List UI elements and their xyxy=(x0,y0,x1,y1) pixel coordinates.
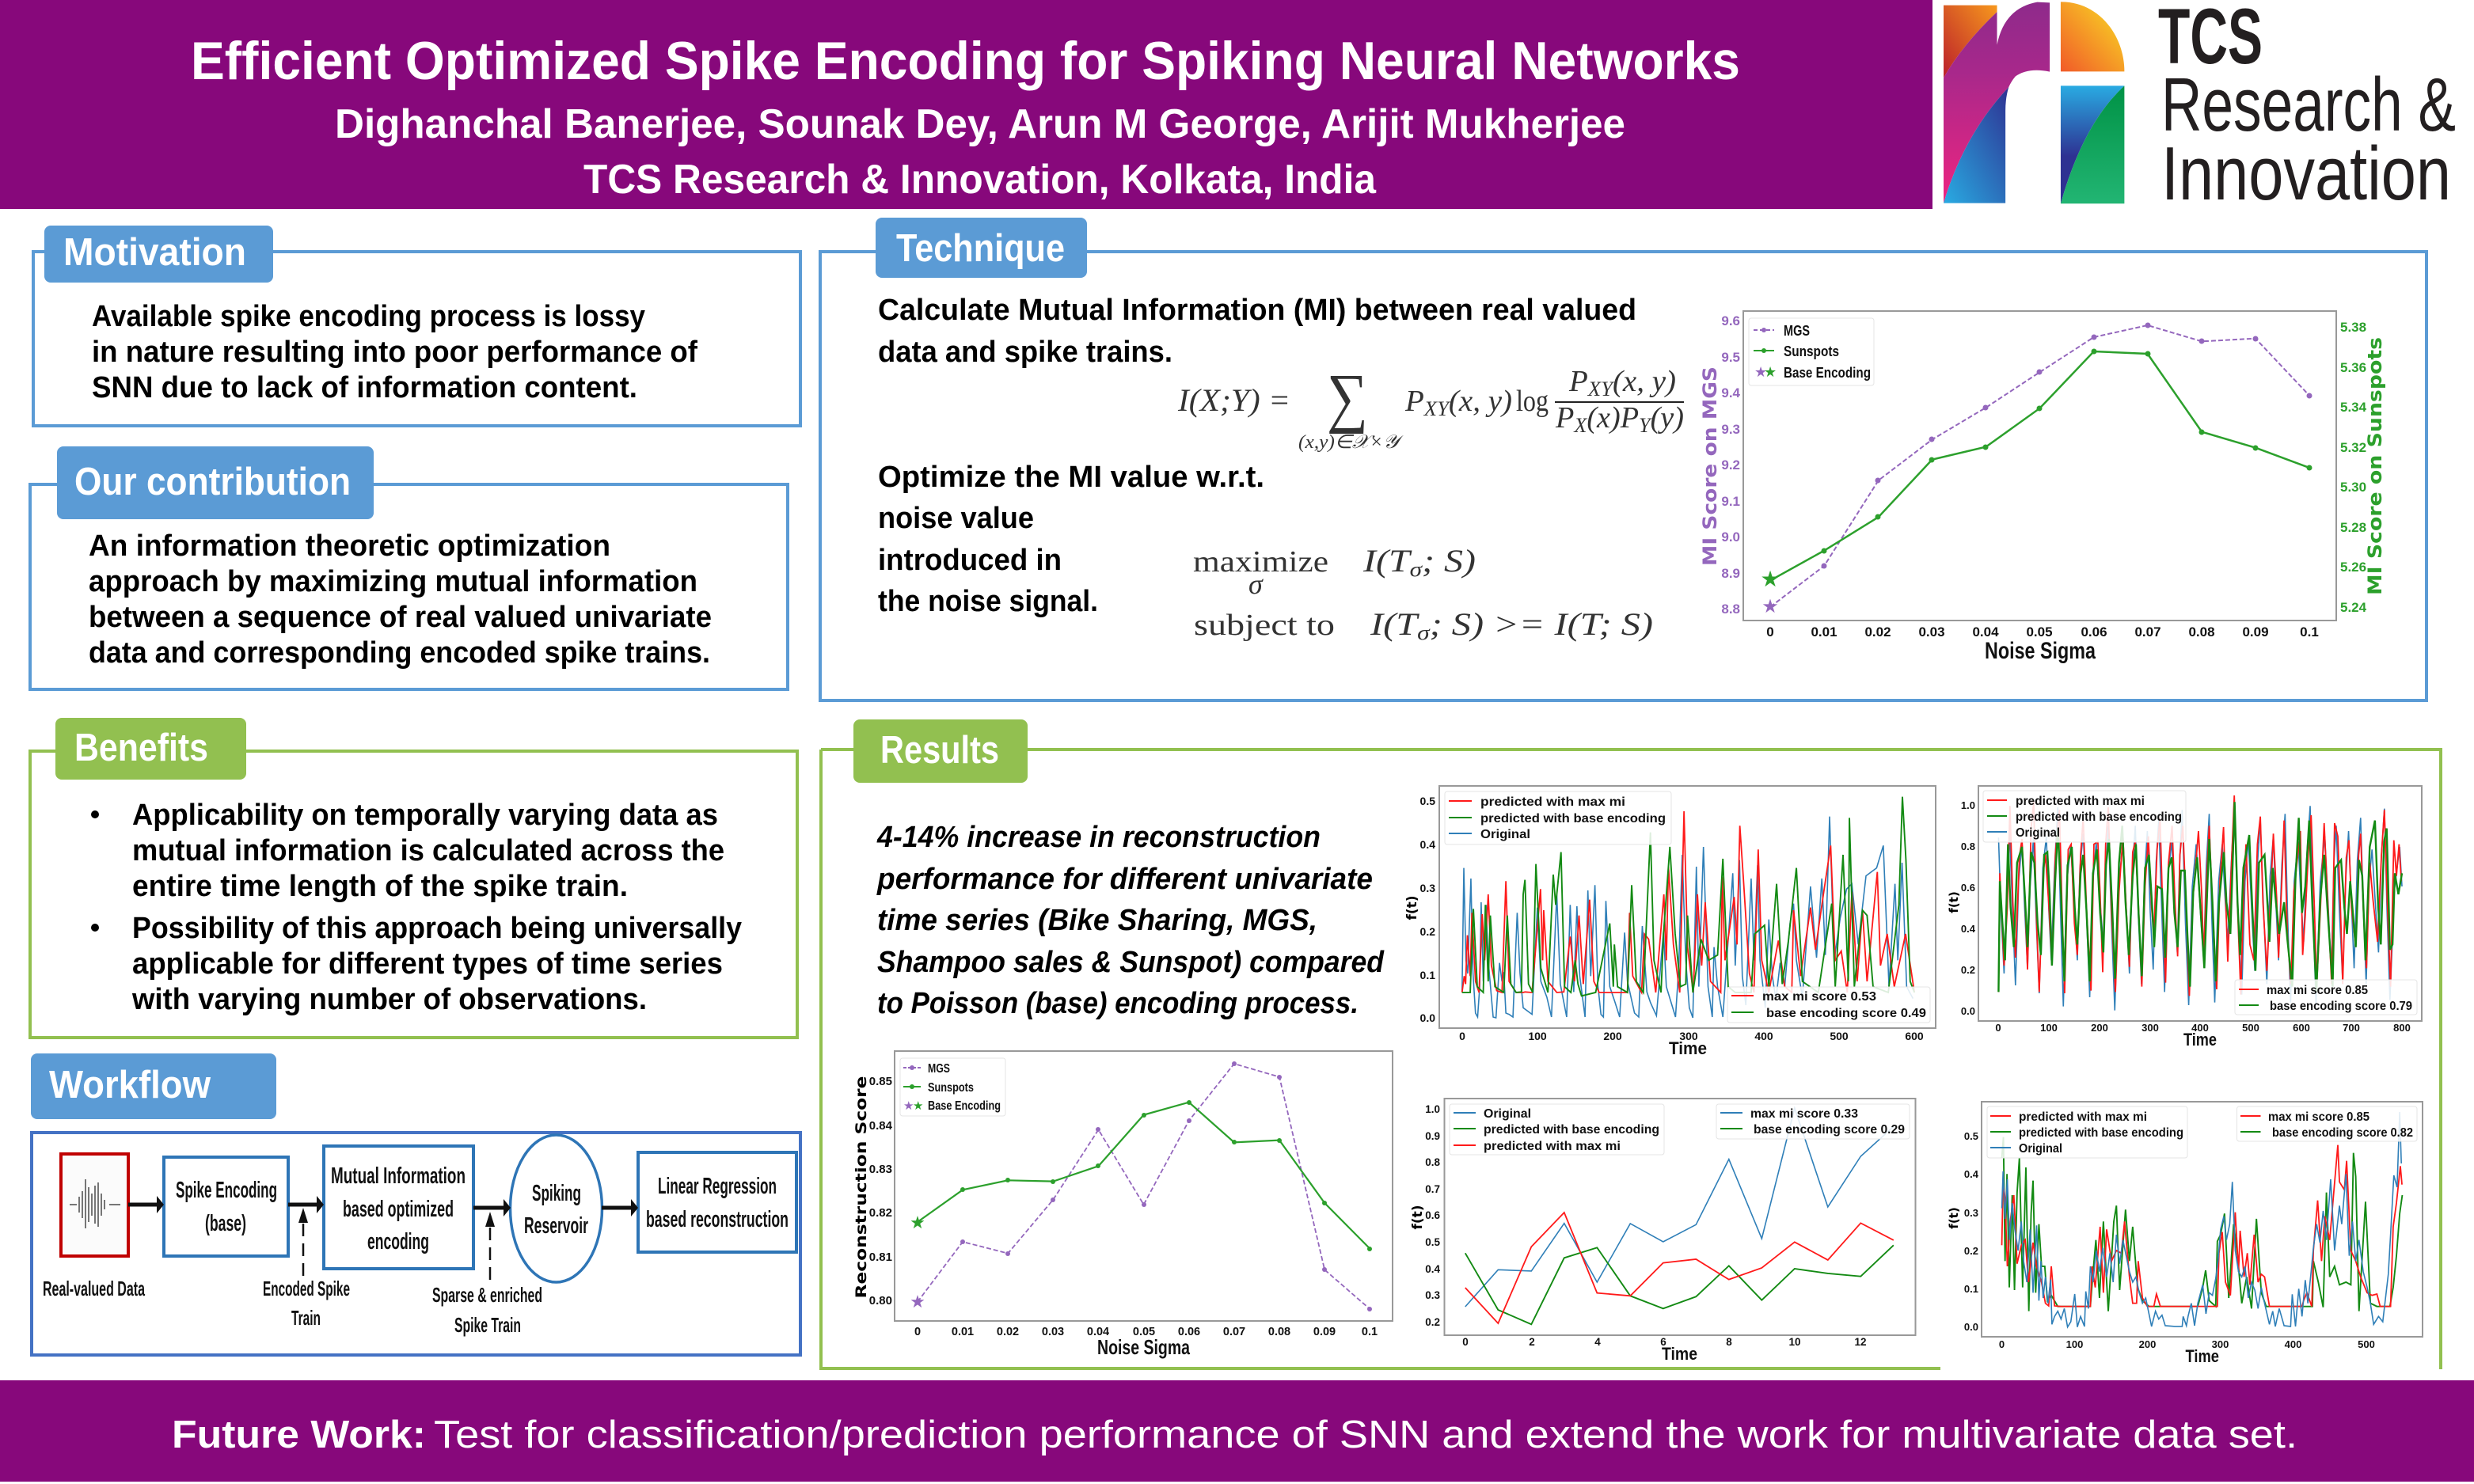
chart: MI score vs noise sigma: 9.0 xyxy=(1721,529,1740,545)
chart: MI score vs noise sigma: 0.09 xyxy=(2242,624,2269,640)
chart: reconstruction short series: 2 xyxy=(1529,1336,1535,1348)
chart: reconstruction score vs noise sigma: Noise Sigma xyxy=(1097,1335,1190,1359)
legend: ★ xyxy=(1754,364,1767,380)
heading: workflow: Workflow xyxy=(49,1064,211,1106)
technique text: optimization: the noise signal. xyxy=(878,585,1098,618)
technique text: mutual information: data and spike trains. xyxy=(878,336,1172,369)
chart: reconstruction 800 steps: 400 xyxy=(2191,1022,2209,1034)
bullet list: Applicability on temporally varying data as xyxy=(132,799,718,832)
contribution text: between a sequence of real valued univariate xyxy=(89,601,712,634)
footer banner: future work xyxy=(0,1380,2474,1482)
panel: technique xyxy=(820,218,2426,700)
chart: reconstruction 550 steps: 100 xyxy=(2066,1338,2083,1350)
heading: technique: Technique xyxy=(896,227,1065,270)
block: linear regression reconstruction xyxy=(638,1152,796,1252)
chart: reconstruction short series xyxy=(1410,1099,1916,1364)
chart: reconstruction 550 steps: 0.4 xyxy=(1964,1168,1979,1180)
chart: reconstruction 800 steps: 0.6 xyxy=(1961,882,1975,894)
chart: reconstruction short series: 12 xyxy=(1854,1336,1867,1348)
equation: mutual information: (x,y)∈𝒳×𝒴 xyxy=(1298,432,1404,453)
affiliation: TCS Research & Innovation, Kolkata, India xyxy=(583,157,1377,203)
score legend xyxy=(2235,980,2417,1015)
heading: motivation: Motivation xyxy=(63,231,246,274)
icon: real-valued data waveform xyxy=(61,1154,128,1256)
chart: reconstruction score vs noise sigma: 0.08 xyxy=(1268,1326,1290,1338)
block: mutual information encoding: Mutual Information xyxy=(331,1163,466,1189)
equation: maximize subject to: maximize xyxy=(1193,545,1328,579)
chart: MI score vs noise sigma: 5.24 xyxy=(2340,600,2367,615)
score legend xyxy=(1727,987,1930,1023)
flow arrows xyxy=(128,1196,638,1216)
chart: reconstruction score vs noise sigma: 0.82 xyxy=(869,1206,892,1220)
heading: our contribution: Our contribution xyxy=(74,461,351,503)
heading: workflow xyxy=(31,1053,276,1119)
chart: reconstruction 550 steps xyxy=(1947,1102,2423,1366)
results text: performance for different univariate xyxy=(876,863,1373,896)
chart: reconstruction 550 steps: 300 xyxy=(2212,1338,2229,1350)
chart: reconstruction 800 steps: 800 xyxy=(2393,1022,2411,1034)
dashed arrow: encoded spike train xyxy=(298,1208,308,1276)
chart: reconstruction 550 steps: 500 xyxy=(2358,1338,2375,1350)
chart: MI score vs noise sigma xyxy=(1699,311,2386,664)
block: mutual information encoding xyxy=(324,1146,473,1269)
chart: MI score vs noise sigma: ★ xyxy=(1761,596,1779,617)
panel: benefits xyxy=(30,718,797,1038)
chart: reconstruction 600 steps: 0.5 xyxy=(1420,795,1435,807)
chart: reconstruction score vs noise sigma: 0 xyxy=(914,1326,921,1338)
legend xyxy=(1749,318,1874,385)
equation: maximize subject to xyxy=(1193,543,1653,644)
chart: MI score vs noise sigma: 5.38 xyxy=(2340,320,2366,335)
chart: MI score vs noise sigma: 5.30 xyxy=(2340,480,2366,495)
chart: reconstruction score vs noise sigma: 0.05 xyxy=(1133,1326,1155,1338)
footer banner: future work: Future Work: xyxy=(172,1414,426,1456)
block: spiking reservoir xyxy=(510,1135,602,1282)
chart: reconstruction 800 steps: 300 xyxy=(2141,1022,2159,1034)
motivation text: in nature resulting into poor performance of xyxy=(92,336,697,369)
chart: reconstruction 600 steps: 300 xyxy=(1679,1030,1698,1042)
results text xyxy=(876,821,1385,1020)
legend xyxy=(1445,791,1671,844)
bullet list: with varying number of observations. xyxy=(131,983,647,1016)
heading: benefits: Benefits xyxy=(74,727,208,769)
panel: our contribution xyxy=(30,446,788,689)
chart: reconstruction 600 steps: 400 xyxy=(1754,1030,1773,1042)
chart: reconstruction 600 steps xyxy=(1404,786,1936,1058)
title: Efficient Optimized Spike Encoding for Spiking Neural Networks xyxy=(191,31,1740,91)
chart: reconstruction short series: 0 xyxy=(1462,1336,1469,1348)
chart: MI score vs noise sigma: 5.32 xyxy=(2340,440,2366,455)
chart: reconstruction short series: Time xyxy=(1662,1344,1697,1364)
equation: mutual information: (x)P xyxy=(1587,401,1639,435)
legend: predicted with base encoding xyxy=(1484,1123,1659,1137)
legend: predicted with max mi xyxy=(1484,1140,1621,1153)
chart: reconstruction 550 steps: 0.0 xyxy=(1964,1321,1978,1333)
technique text: mutual information: Calculate Mutual Information (MI) between real valued xyxy=(878,294,1636,327)
equation: maximize subject to: σ xyxy=(1417,621,1431,644)
chart: MI score vs noise sigma: 0.1 xyxy=(2300,624,2319,640)
legend: Sunspots xyxy=(1784,343,1839,359)
chart: MI score vs noise sigma: 0.08 xyxy=(2188,624,2215,640)
chart: reconstruction 600 steps: 0.3 xyxy=(1420,882,1435,894)
equation: mutual information: log xyxy=(1516,385,1549,418)
heading: benefits xyxy=(55,718,246,780)
chart: reconstruction score vs noise sigma: 0.85 xyxy=(869,1075,892,1088)
legend: Original xyxy=(2016,826,2060,840)
block: spiking reservoir: Reservoir xyxy=(524,1213,588,1239)
chart: reconstruction 600 steps: 0.4 xyxy=(1420,838,1435,851)
equation: maximize subject to: σ xyxy=(1410,558,1423,581)
chart: reconstruction 800 steps: 0 xyxy=(1995,1022,2001,1034)
chart: reconstruction 550 steps: 0.1 xyxy=(1964,1283,1978,1295)
chart: reconstruction score vs noise sigma: 0.80 xyxy=(869,1294,892,1308)
equation: mutual information: P xyxy=(1405,385,1423,418)
chart: reconstruction 800 steps: 600 xyxy=(2293,1022,2310,1034)
score legend: max mi score 0.85 xyxy=(2267,984,2368,997)
chart: MI score vs noise sigma: 9.3 xyxy=(1721,422,1740,437)
caption: encoded spike train: Encoded Spike xyxy=(263,1277,350,1300)
chart: reconstruction 550 steps: 0.3 xyxy=(1964,1207,1978,1219)
chart: reconstruction short series: 4 xyxy=(1594,1336,1601,1348)
bullet list xyxy=(91,799,742,1016)
results text: to Poisson (base) encoding process. xyxy=(877,987,1359,1020)
equation: mutual information: (x, y) xyxy=(1613,365,1676,398)
chart: MI score vs noise sigma: 0 xyxy=(1766,624,1774,640)
legend: predicted with base encoding xyxy=(2019,1126,2183,1140)
chart: reconstruction 800 steps: Time xyxy=(2183,1030,2217,1049)
legend: Base Encoding xyxy=(1784,365,1871,381)
block: spiking reservoir: Spiking xyxy=(532,1181,581,1206)
equation: mutual information: (y) xyxy=(1651,401,1684,435)
legend: predicted with base encoding xyxy=(2016,810,2182,824)
equation: maximize subject to: ; S) >= I(T; S) xyxy=(1430,606,1653,642)
chart: reconstruction 600 steps: 500 xyxy=(1830,1030,1849,1042)
motivation text: SNN due to lack of information content. xyxy=(92,371,637,404)
heading: results: Results xyxy=(880,729,999,772)
caption: encoded spike train xyxy=(263,1277,350,1330)
chart: reconstruction short series: 0.4 xyxy=(1425,1263,1440,1275)
equation: mutual information xyxy=(1177,361,1684,453)
score legend xyxy=(1716,1104,1910,1139)
score legend: max mi score 0.53 xyxy=(1762,990,1876,1004)
chart: reconstruction score vs noise sigma: 0.04 xyxy=(1087,1326,1109,1338)
chart: reconstruction short series: 0.5 xyxy=(1425,1236,1440,1248)
results text: 4-14% increase in reconstruction xyxy=(876,821,1321,854)
chart: MI score vs noise sigma: Noise Sigma xyxy=(1985,638,2096,664)
legend: predicted with max mi xyxy=(1480,795,1625,809)
contribution text: data and corresponding encoded spike trains. xyxy=(89,636,710,670)
chart: reconstruction 550 steps: 0.2 xyxy=(1964,1245,1978,1257)
block: mutual information encoding: based optimized xyxy=(343,1197,454,1222)
chart: MI score vs noise sigma: 0.06 xyxy=(2081,624,2107,640)
chart: reconstruction score vs noise sigma: 0.83 xyxy=(869,1163,892,1176)
chart: reconstruction 800 steps: 0.2 xyxy=(1961,964,1975,976)
caption: sparse and enriched spike train: Spike Train xyxy=(454,1313,521,1337)
equation: maximize subject to: I(T xyxy=(1370,606,1409,642)
legend: Sunspots xyxy=(928,1081,974,1095)
chart: reconstruction 800 steps: f(t) xyxy=(1947,891,1961,913)
chart: MI score vs noise sigma: 5.34 xyxy=(2340,400,2367,415)
block: spike encoding base: (base) xyxy=(205,1211,246,1236)
heading: technique xyxy=(876,218,1087,278)
footer banner: future work: Test for classification/prediction performance of SNN and extend the work for multivariate data set. xyxy=(434,1414,2297,1456)
contribution text: An information theoretic optimization xyxy=(89,529,610,563)
chart: reconstruction score vs noise sigma xyxy=(853,1051,1393,1359)
chart: reconstruction short series: 0.2 xyxy=(1425,1316,1440,1328)
chart: reconstruction 800 steps xyxy=(1947,786,2422,1049)
technique text: optimization: Optimize the MI value w.r.t. xyxy=(878,461,1264,494)
chart: reconstruction score vs noise sigma: 0.09 xyxy=(1313,1326,1336,1338)
chart: reconstruction short series: 1.0 xyxy=(1425,1103,1440,1115)
chart: reconstruction short series: 0.6 xyxy=(1425,1209,1440,1221)
chart: reconstruction short series: 0.8 xyxy=(1425,1156,1440,1168)
chart: reconstruction 600 steps: 100 xyxy=(1528,1030,1547,1042)
chart: MI score vs noise sigma: 9.5 xyxy=(1721,350,1740,365)
chart: reconstruction 550 steps: 0.5 xyxy=(1964,1130,1978,1142)
chart: MI score vs noise sigma: 5.26 xyxy=(2340,560,2366,575)
equation: maximize subject to: I(T xyxy=(1363,543,1402,579)
chart: MI score vs noise sigma: MI Score on MGS xyxy=(1699,366,1721,566)
panel: workflow diagram xyxy=(32,1133,800,1355)
chart: reconstruction score vs noise sigma: ★ xyxy=(910,1292,925,1311)
caption: sparse and enriched spike train xyxy=(432,1283,542,1337)
equation: mutual information: XY xyxy=(1587,378,1615,400)
chart: MI score vs noise sigma: 8.8 xyxy=(1721,602,1740,617)
chart: reconstruction 550 steps: 0 xyxy=(1999,1338,2005,1350)
score legend: base encoding score 0.29 xyxy=(1754,1123,1905,1137)
chart: reconstruction 800 steps: 0.0 xyxy=(1961,1005,1975,1017)
chart: reconstruction 600 steps: 200 xyxy=(1603,1030,1622,1042)
equation: mutual information: Y xyxy=(1639,414,1652,437)
chart: reconstruction 600 steps: Time xyxy=(1669,1038,1707,1058)
legend xyxy=(1450,1104,1664,1155)
chart: reconstruction short series: f(t) xyxy=(1410,1205,1426,1230)
chart: MI score vs noise sigma: 0.02 xyxy=(1864,624,1891,640)
score legend: max mi score 0.85 xyxy=(2268,1110,2369,1124)
contribution text: approach by maximizing mutual information xyxy=(89,565,697,598)
chart: reconstruction short series: 8 xyxy=(1726,1336,1732,1348)
legend: Original xyxy=(1484,1107,1531,1121)
technique text: optimization: noise value xyxy=(878,502,1034,535)
chart: reconstruction score vs noise sigma: 0.84 xyxy=(869,1119,893,1133)
chart: MI score vs noise sigma: 0.01 xyxy=(1811,624,1837,640)
chart: reconstruction short series: 0.3 xyxy=(1425,1289,1440,1301)
heading: our contribution xyxy=(57,446,374,519)
caption: real-valued data: Real-valued Data xyxy=(43,1277,145,1300)
chart: MI score vs noise sigma: 9.2 xyxy=(1721,457,1740,473)
score legend: base encoding score 0.49 xyxy=(1766,1007,1926,1020)
chart: reconstruction 600 steps: 0.2 xyxy=(1420,925,1435,938)
chart: reconstruction score vs noise sigma: 0.07 xyxy=(1223,1326,1245,1338)
chart: reconstruction 550 steps: 400 xyxy=(2285,1338,2301,1350)
block: linear regression reconstruction: based reconstruction xyxy=(646,1207,789,1232)
legend: ★ xyxy=(1764,364,1777,380)
block: mutual information encoding: encoding xyxy=(367,1229,429,1254)
legend: MGS xyxy=(928,1062,950,1076)
chart: MI score vs noise sigma: 9.4 xyxy=(1721,385,1741,400)
technique text: optimization xyxy=(878,461,1264,618)
results text: time series (Bike Sharing, MGS, xyxy=(877,904,1317,937)
chart: reconstruction score vs noise sigma: 0.02 xyxy=(997,1326,1019,1338)
dashed arrow: sparse spike train xyxy=(485,1212,495,1280)
chart: reconstruction score vs noise sigma: 0.1 xyxy=(1362,1326,1378,1338)
chart: reconstruction 600 steps: f(t) xyxy=(1404,895,1420,920)
score legend: base encoding score 0.82 xyxy=(2272,1126,2413,1140)
legend xyxy=(900,1058,1005,1116)
block: spike encoding base: Spike Encoding xyxy=(176,1178,277,1203)
block: spike encoding base xyxy=(164,1157,288,1256)
chart: MI score vs noise sigma: 0.04 xyxy=(1972,624,1999,640)
chart: MI score vs noise sigma: 0.03 xyxy=(1918,624,1945,640)
equation: mutual information: I(X;Y) = xyxy=(1177,382,1290,418)
chart: reconstruction 800 steps: 0.4 xyxy=(1961,923,1976,935)
chart: reconstruction 550 steps: f(t) xyxy=(1947,1207,1961,1229)
chart: reconstruction 800 steps: 200 xyxy=(2091,1022,2108,1034)
equation: mutual information: (x, y) xyxy=(1449,385,1512,418)
bullet list: mutual information is calculated across the xyxy=(132,834,724,867)
results text: Shampoo sales & Sunspot) compared xyxy=(877,946,1385,979)
chart: MI score vs noise sigma: MI Score on Sunspots xyxy=(2364,337,2386,595)
score legend: base encoding score 0.79 xyxy=(2270,1000,2412,1013)
authors: Dighanchal Banerjee, Sounak Dey, Arun M George, Arijit Mukherjee xyxy=(335,101,1625,147)
chart: reconstruction score vs noise sigma: 0.81 xyxy=(869,1251,892,1264)
chart: reconstruction 800 steps: 0.8 xyxy=(1961,841,1975,852)
chart: MI score vs noise sigma: 9.1 xyxy=(1721,494,1740,509)
chart: MI score vs noise sigma: 8.9 xyxy=(1721,566,1740,581)
block: linear regression reconstruction: Linear Regression xyxy=(658,1174,777,1199)
equation: mutual information: P xyxy=(1569,365,1587,398)
chart: reconstruction 800 steps: 700 xyxy=(2343,1022,2360,1034)
chart: reconstruction 600 steps: 0 xyxy=(1459,1030,1465,1042)
legend: Original xyxy=(2019,1142,2062,1156)
chart: MI score vs noise sigma: 0.05 xyxy=(2026,624,2053,640)
legend: predicted with base encoding xyxy=(1480,812,1666,825)
chart: reconstruction score vs noise sigma: 0.01 xyxy=(952,1326,974,1338)
chart: reconstruction 600 steps: 0.1 xyxy=(1420,969,1435,981)
chart: reconstruction short series: 0.9 xyxy=(1425,1130,1440,1142)
chart: reconstruction 800 steps: 1.0 xyxy=(1961,799,1975,811)
chart: MI score vs noise sigma: 5.28 xyxy=(2340,520,2366,535)
legend: predicted with max mi xyxy=(2019,1110,2147,1124)
chart: reconstruction score vs noise sigma: Reconstruction Score xyxy=(853,1076,870,1298)
technique text: mutual information xyxy=(878,294,1636,369)
chart: reconstruction score vs noise sigma: ★ xyxy=(910,1213,925,1232)
panel: motivation xyxy=(33,226,800,426)
chart: reconstruction 550 steps: Time xyxy=(2185,1346,2219,1366)
legend: MGS xyxy=(1784,323,1810,339)
chart: reconstruction 600 steps: 600 xyxy=(1905,1030,1924,1042)
legend: predicted with max mi xyxy=(2016,795,2145,808)
equation: maximize subject to: subject to xyxy=(1194,609,1335,642)
bullet list: applicable for different types of time series xyxy=(132,947,723,981)
chart: MI score vs noise sigma: 0.07 xyxy=(2134,624,2161,640)
chart: reconstruction 550 steps: 200 xyxy=(2139,1338,2156,1350)
chart: reconstruction short series: 6 xyxy=(1660,1336,1666,1348)
heading: results xyxy=(853,719,1028,783)
equation: maximize subject to: ; S) xyxy=(1422,543,1476,579)
legend: ★ xyxy=(903,1099,914,1113)
logo: TCS Research and Innovation xyxy=(1944,0,2456,216)
legend xyxy=(1983,791,2186,842)
heading: motivation xyxy=(44,226,273,283)
equation: mutual information: ∑ xyxy=(1327,361,1368,435)
chart: reconstruction short series: 10 xyxy=(1788,1336,1801,1348)
bullet list: Possibility of this approach being universally xyxy=(132,912,742,945)
panel: results xyxy=(821,719,2441,1369)
score legend xyxy=(2237,1106,2417,1141)
header banner xyxy=(0,0,1932,209)
equation: mutual information: X xyxy=(1573,414,1587,437)
score legend: max mi score 0.33 xyxy=(1750,1107,1858,1121)
contribution text xyxy=(89,529,712,670)
equation: mutual information: XY xyxy=(1423,397,1451,420)
motivation text xyxy=(92,300,697,404)
caption: sparse and enriched spike train: Sparse & enriched xyxy=(432,1283,542,1307)
equation: mutual information: P xyxy=(1556,401,1574,435)
legend: ★ xyxy=(913,1099,923,1113)
chart: reconstruction score vs noise sigma: 0.06 xyxy=(1178,1326,1200,1338)
technique text: optimization: introduced in xyxy=(878,544,1062,577)
chart: reconstruction 800 steps: 100 xyxy=(2040,1022,2058,1034)
motivation text: Available spike encoding process is lossy xyxy=(92,300,645,333)
chart: reconstruction score vs noise sigma: 0.03 xyxy=(1042,1326,1064,1338)
bullet list: entire time length of the spike train. xyxy=(132,870,628,903)
legend xyxy=(1987,1106,2187,1158)
chart: reconstruction 600 steps: 0.0 xyxy=(1420,1011,1435,1024)
legend: Original xyxy=(1480,828,1530,841)
chart: MI score vs noise sigma: 5.36 xyxy=(2340,360,2366,375)
legend: Base Encoding xyxy=(928,1099,1001,1113)
chart: reconstruction 800 steps: 500 xyxy=(2242,1022,2259,1034)
equation: maximize subject to: σ xyxy=(1248,568,1264,600)
chart: MI score vs noise sigma: ★ xyxy=(1760,567,1780,591)
chart: MI score vs noise sigma: 9.6 xyxy=(1721,313,1740,328)
chart: reconstruction short series: 0.7 xyxy=(1425,1183,1440,1195)
caption: encoded spike train: Train xyxy=(291,1306,321,1330)
